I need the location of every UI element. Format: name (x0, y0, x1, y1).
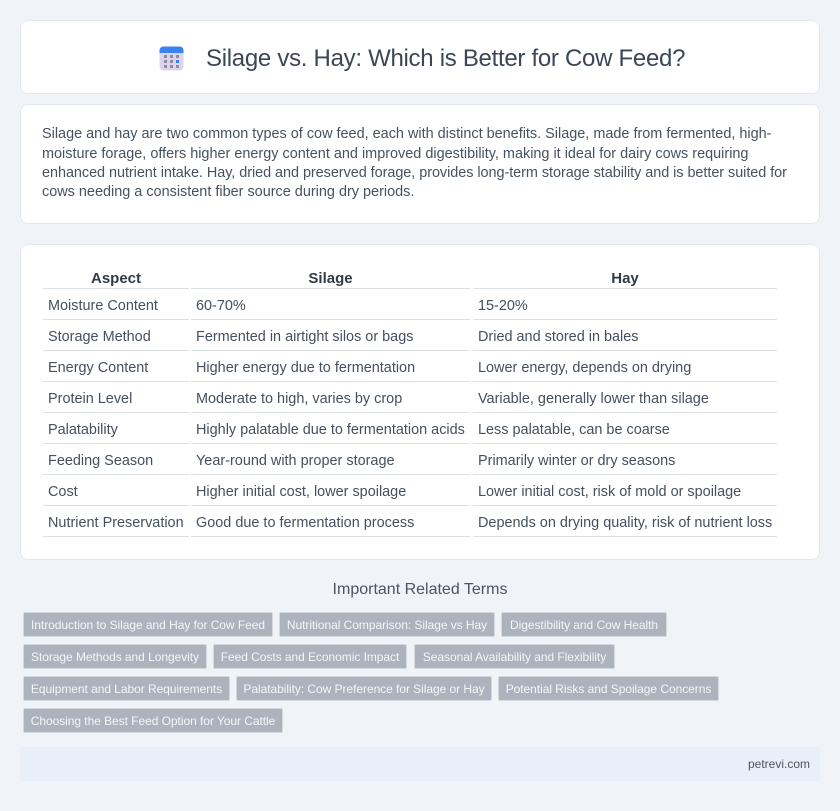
title: Silage vs. Hay: Which is Better for Cow Feed? (206, 45, 685, 72)
intro paragraph: moisture forage, offers higher energy content and improved digestibility, making it ideal for dairy cows requiring (42, 146, 748, 162)
comparison table: Year-round with proper storage (196, 453, 395, 469)
comparison table panel (20, 244, 820, 560)
related terms tags: Potential Risks and Spoilage Concerns (506, 682, 711, 696)
intro paragraph: enhanced nutrient intake. Hay, dried and preserved forage, provides long-term storage stability and is better suited for (42, 165, 787, 181)
comparison table: Less palatable, can be coarse (478, 422, 670, 438)
related terms heading: Important Related Terms (333, 581, 507, 598)
related terms tags: Equipment and Labor Requirements (31, 682, 222, 696)
intro paragraph: Silage and hay are two common types of cow feed, each with distinct benefits. Silage, made from fermented, high- (42, 126, 771, 142)
related terms tags: Feed Costs and Economic Impact (221, 650, 399, 664)
comparison table: Good due to fermentation process (196, 515, 414, 531)
comparison table: Depends on drying quality, risk of nutrient loss (478, 515, 772, 531)
comparison table: Storage Method (48, 329, 151, 345)
comparison table: Protein Level (48, 391, 132, 407)
comparison table: Energy Content (48, 360, 148, 376)
comparison table: 60-70% (196, 298, 246, 314)
comparison table: Primarily winter or dry seasons (478, 453, 675, 469)
comparison table: Lower energy, depends on drying (478, 360, 691, 376)
related terms tags: Palatability: Cow Preference for Silage or Hay (243, 682, 485, 696)
comparison table: Highly palatable due to fermentation acids (196, 422, 465, 438)
related terms tags: Introduction to Silage and Hay for Cow Feed (31, 618, 265, 632)
related terms tags: Choosing the Best Feed Option for Your Cattle (31, 714, 275, 728)
intro paragraph (42, 126, 787, 200)
related terms tags (23, 612, 719, 733)
comparison table: Nutrient Preservation (48, 515, 184, 531)
intro paragraph: cows needing a consistent fiber source during dry periods. (42, 184, 414, 200)
header panel (20, 20, 820, 94)
comparison table: Silage (308, 270, 353, 287)
footer site name: petrevi.com (748, 757, 810, 771)
comparison table: Palatability (48, 422, 118, 438)
related terms tags: Storage Methods and Longevity (31, 650, 199, 664)
related terms tags: Seasonal Availability and Flexibility (423, 650, 606, 664)
intro text panel (20, 104, 820, 224)
comparison table: Aspect (91, 270, 141, 287)
comparison table: Higher energy due to fermentation (196, 360, 415, 376)
comparison table: Cost (48, 484, 78, 500)
comparison table: Fermented in airtight silos or bags (196, 329, 413, 345)
icon: calendar (160, 46, 184, 70)
comparison table: 15-20% (478, 298, 528, 314)
related terms tags: Digestibility and Cow Health (510, 618, 658, 632)
comparison table (43, 270, 777, 537)
comparison table: Variable, generally lower than silage (478, 391, 709, 407)
comparison table: Dried and stored in bales (478, 329, 639, 345)
comparison table: Moisture Content (48, 298, 158, 314)
comparison table: Hay (611, 270, 639, 287)
comparison table: Higher initial cost, lower spoilage (196, 484, 406, 500)
footer bar (20, 747, 820, 781)
related terms tags: Nutritional Comparison: Silage vs Hay (287, 618, 487, 632)
comparison table: Moderate to high, varies by crop (196, 391, 402, 407)
comparison table: Feeding Season (48, 453, 153, 469)
comparison table: Lower initial cost, risk of mold or spoilage (478, 484, 741, 500)
